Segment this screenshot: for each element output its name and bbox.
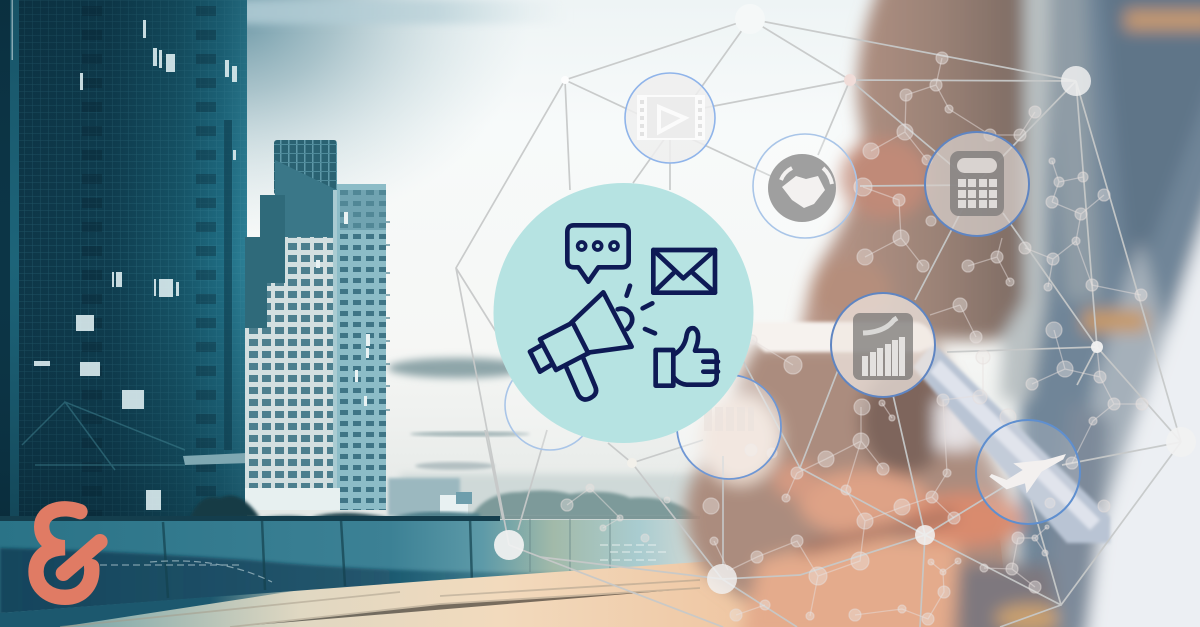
icon: speech bubble: [567, 225, 629, 282]
building: dark glass tower: [0, 0, 315, 525]
icon circle: calculator: [925, 132, 1029, 236]
jeans: [1020, 0, 1200, 627]
upper hand: [800, 0, 1024, 340]
road: [0, 540, 1010, 627]
palm behind tablet: [686, 345, 1010, 627]
network lines: [456, 19, 1181, 627]
main teal badge: [494, 183, 754, 443]
trees along the horizon: [190, 490, 700, 518]
icon circle: shopping cart, partly hidden: [677, 375, 781, 479]
icon set, navy line art: [530, 225, 718, 399]
icon circle: airplane: [976, 420, 1080, 524]
icon circle: handshake: [753, 134, 857, 238]
icon circle: video: [625, 73, 715, 163]
fingers: [799, 470, 931, 536]
fence: [0, 516, 710, 627]
hand and jeans, blurred photo background: [686, 0, 1200, 627]
icon: thumbs up: [656, 328, 718, 386]
molecule graph: [561, 52, 1148, 625]
network hub nodes: [494, 4, 1196, 594]
icon circle: hidden behind main badge: [505, 360, 595, 450]
logo: ampersand: [36, 509, 100, 597]
building: light residential tower: [245, 140, 472, 517]
tablet: [750, 322, 1110, 543]
icon: envelope: [653, 250, 715, 293]
icon: megaphone: [530, 286, 655, 399]
icon circle: growth chart: [831, 293, 935, 397]
